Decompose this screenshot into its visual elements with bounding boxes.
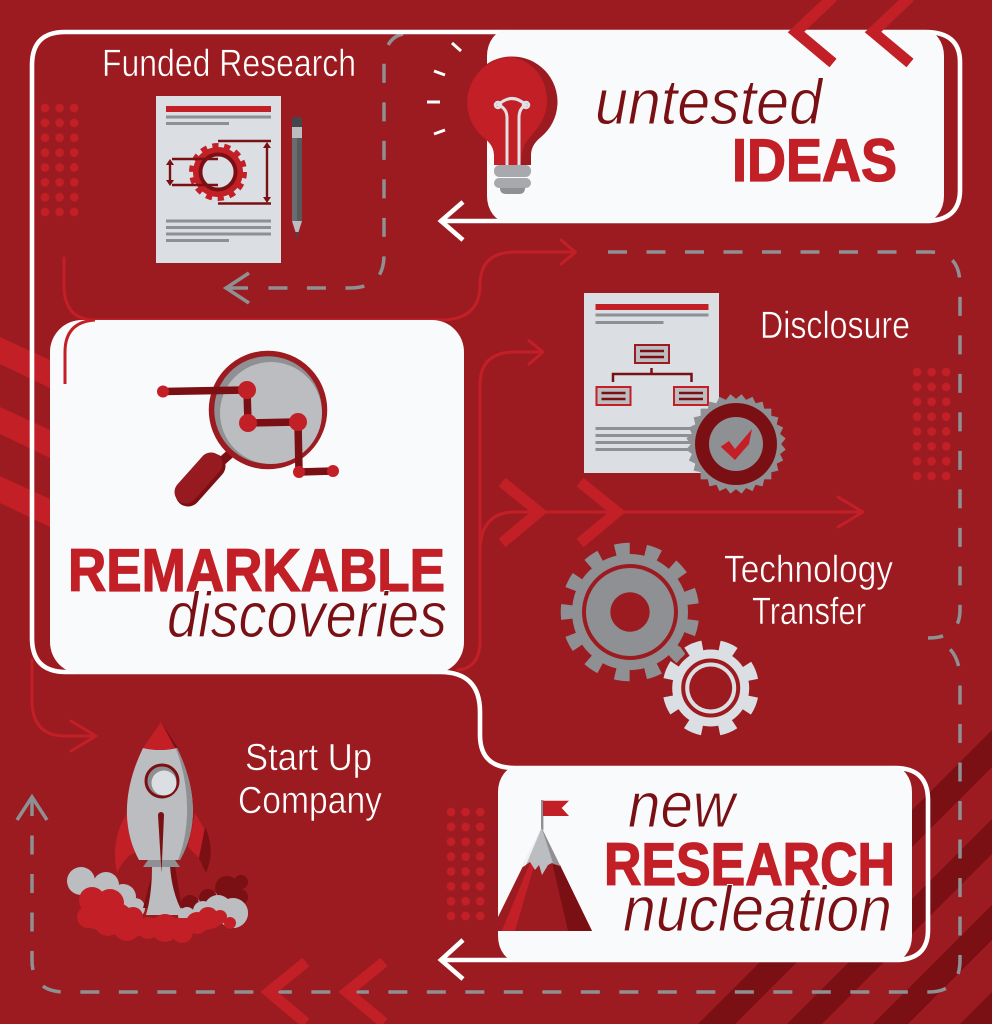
arrow: gray dashed to funded research (226, 34, 403, 303)
label: Funded Research: Funded Research (102, 43, 356, 85)
heading: new RESEARCH nucleation (604, 769, 895, 945)
label: Start Up Company: Start Up (245, 737, 372, 779)
chevrons: middle (502, 482, 617, 543)
heading: REMARKABLE discoveries (68, 537, 447, 651)
icon: light bulb (427, 43, 558, 194)
icon: rocket launching (67, 722, 248, 943)
heading: untested IDEAS: IDEAS (732, 127, 897, 194)
heading: REMARKABLE discoveries: REMARKABLE (68, 537, 445, 604)
heading: new RESEARCH nucleation: new (628, 769, 738, 841)
heading: new RESEARCH nucleation: RESEARCH (604, 831, 895, 898)
heading: untested IDEAS: untested (595, 66, 824, 138)
label: Technology Transfer: Transfer (752, 591, 866, 633)
heading: REMARKABLE discoveries: discoveries (167, 579, 447, 651)
small gear (660, 637, 761, 739)
heading: new RESEARCH nucleation: nucleation (623, 873, 892, 945)
label: Technology Transfer: Technology (724, 549, 893, 591)
large gear (560, 542, 700, 682)
icon: approval seal (686, 394, 786, 494)
label: Technology Transfer (724, 549, 893, 633)
icon: pencil (292, 117, 302, 241)
heading: untested IDEAS (595, 66, 897, 194)
icon: mountain with flag (498, 800, 592, 931)
icon: magnifying glass with network (157, 354, 339, 494)
label: Start Up Company: Company (238, 780, 382, 822)
arrow: thin red path to disclosure (458, 341, 543, 670)
arrow: gray dashed bottom loop to start up (17, 645, 960, 992)
arrow: thin red path to start up (32, 660, 96, 751)
panel: new research nucleation (498, 766, 912, 962)
dot grid: right (910, 365, 954, 484)
label: Disclosure: Disclosure (760, 305, 910, 347)
icon: funded research document with gear (156, 96, 281, 263)
arrow: thin red path to disclosure top (64, 240, 576, 320)
arrow: gray dashed right loop (608, 252, 960, 638)
arrow: thin red path to technology transfer (480, 497, 863, 552)
dot grid: top left (38, 101, 82, 220)
icon: gears (560, 542, 761, 739)
panel: remarkable discoveries (50, 320, 464, 674)
panel: untested ideas (487, 30, 944, 222)
dot grid: bottom (444, 805, 488, 924)
chevrons: bottom (269, 962, 384, 1023)
label: Start Up Company (238, 737, 382, 822)
icon: disclosure document with org chart (584, 293, 719, 473)
chevrons: top right (796, 0, 910, 63)
